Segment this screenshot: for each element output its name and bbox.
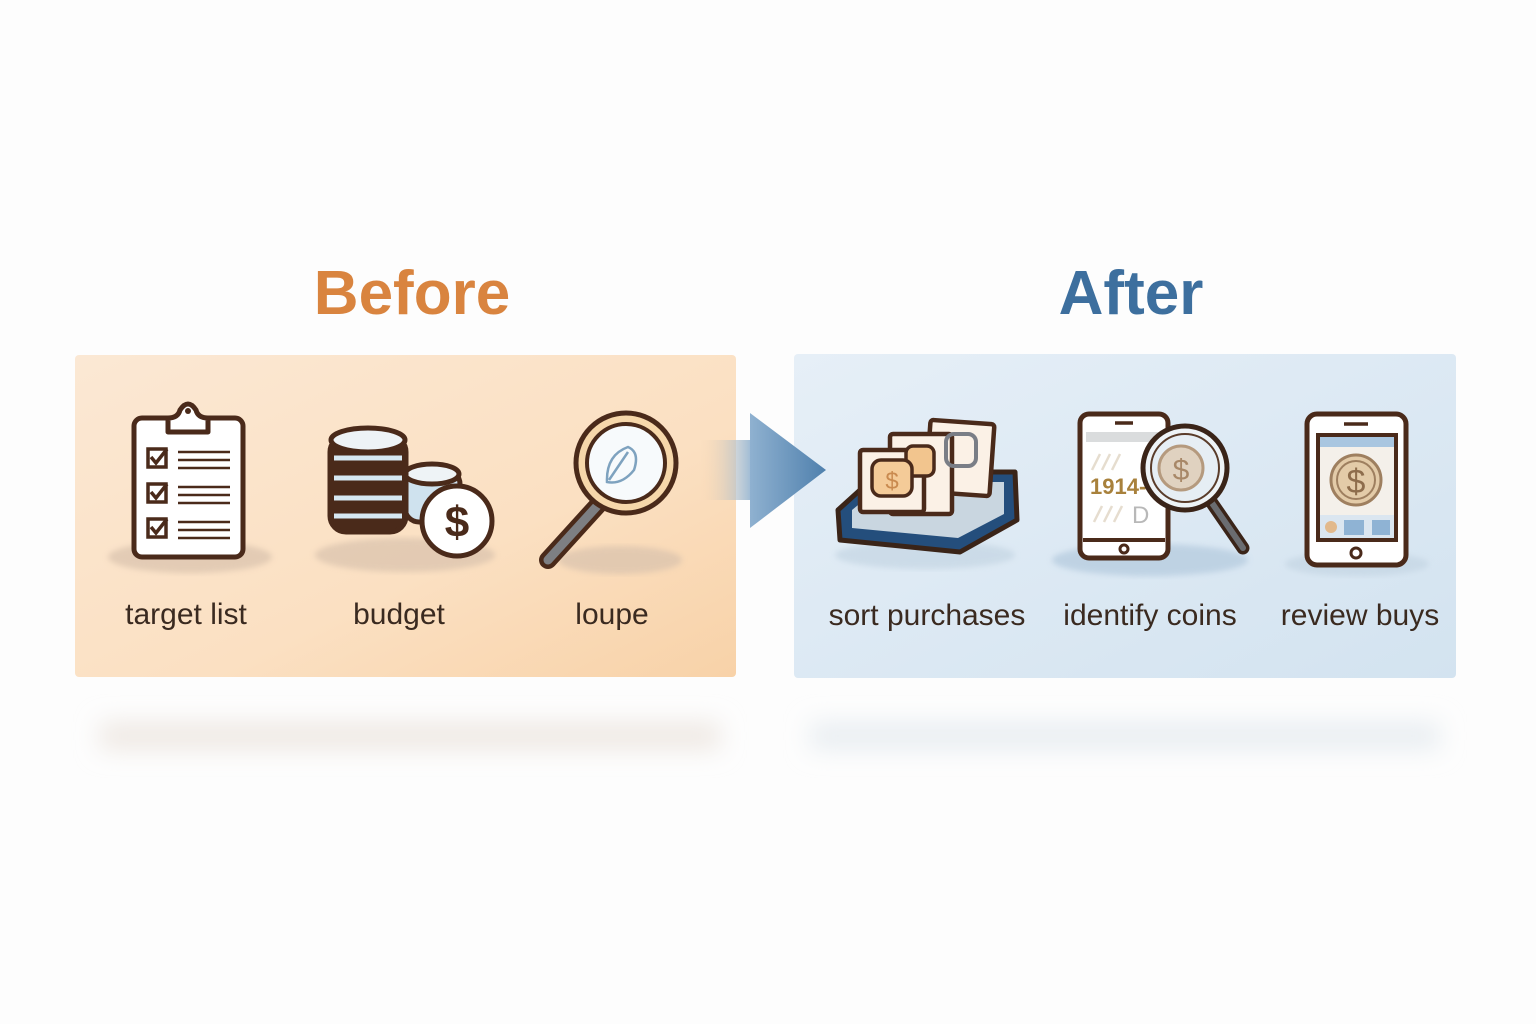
- label: sort purchases: sort purchases: [829, 599, 1025, 632]
- label: target list: target list: [125, 598, 248, 631]
- panel shadows: [100, 722, 1440, 750]
- icon: clipboard target list: [108, 404, 272, 573]
- arrow: [700, 413, 826, 528]
- icon: phone with magnifier identify coins: [1052, 414, 1248, 576]
- icon: phone with magnifier identify coins: D: [1132, 502, 1149, 529]
- title: Before: Before: [314, 259, 510, 328]
- icon: phone review buys: $: [1347, 463, 1366, 501]
- icon: loupe: [548, 413, 682, 574]
- icon: tray sort purchases: $: [885, 468, 899, 495]
- label: review buys: review buys: [1281, 599, 1439, 632]
- panel: before: [75, 355, 736, 677]
- label: budget: budget: [353, 598, 446, 631]
- icon: phone with magnifier identify coins: 1914-: [1090, 474, 1146, 499]
- icon: coins budget: [315, 428, 495, 572]
- icon: tray sort purchases: [835, 420, 1017, 569]
- icon: phone review buys: [1285, 414, 1429, 576]
- label: identify coins: identify coins: [1063, 599, 1237, 632]
- icon: phone with magnifier identify coins: $: [1173, 454, 1190, 487]
- icon: coins budget: $: [445, 498, 469, 547]
- title: After: After: [1059, 259, 1203, 328]
- label: loupe: loupe: [575, 598, 649, 631]
- panel: after: [794, 354, 1456, 678]
